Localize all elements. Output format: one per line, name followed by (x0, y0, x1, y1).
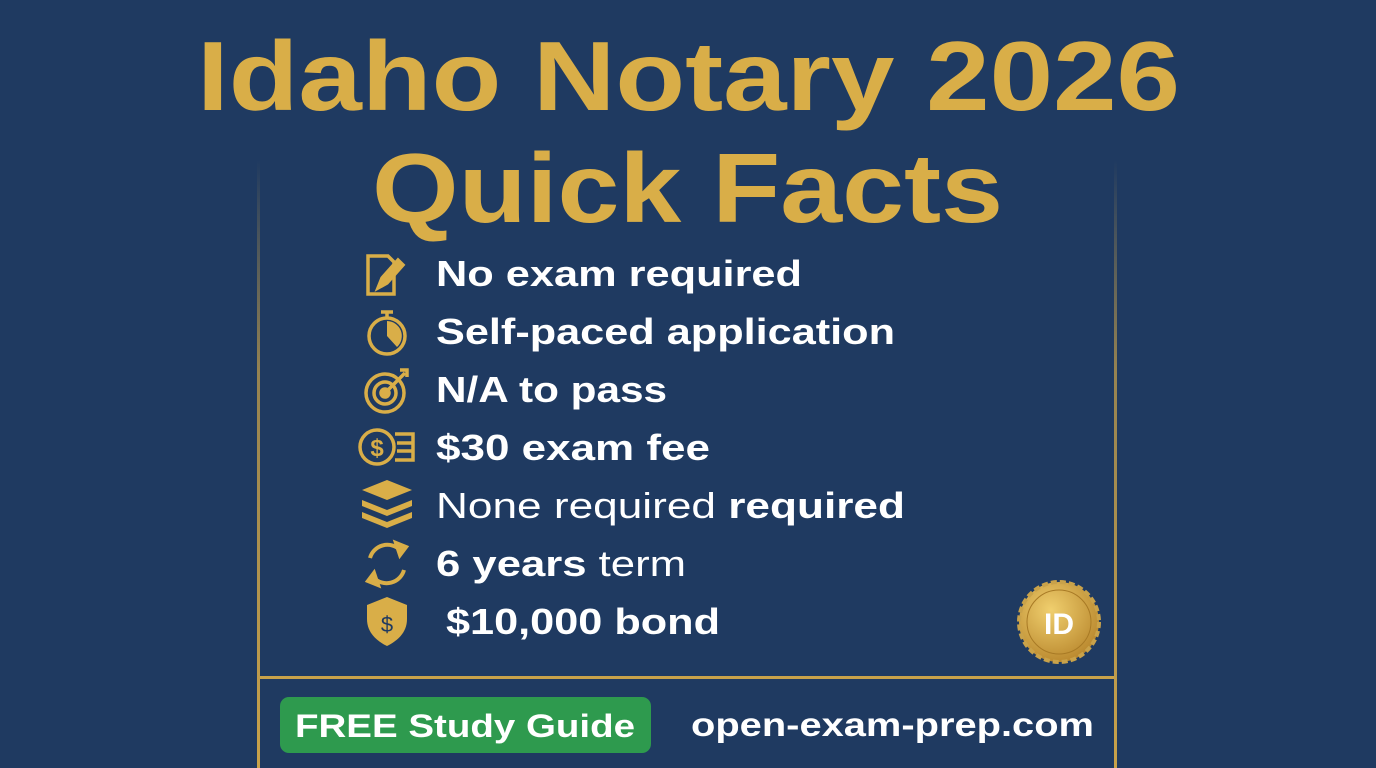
title: Quick Facts (372, 133, 1003, 243)
button: FREE Study Guide (280, 697, 651, 753)
fact: application: Self-paced application (436, 311, 895, 352)
fact: fee: $ (370, 435, 384, 462)
title (197, 21, 1180, 243)
fact: pass: N/A to pass (436, 369, 667, 410)
url: open-exam-prep.com (691, 706, 1094, 743)
fact: term: 6 years term (436, 543, 686, 584)
fact: application (369, 311, 895, 354)
fact: fee: $30 exam fee (436, 427, 710, 468)
fact: pass (366, 369, 667, 412)
seal: ID: ID (1044, 608, 1074, 641)
fact: fee (360, 427, 710, 468)
fact: education: None required required (436, 485, 905, 526)
panel frame (257, 160, 1117, 768)
button: FREE Study Guide: FREE Study Guide (295, 708, 635, 744)
fact: bond: $10,000 bond (446, 601, 720, 642)
facts list (360, 253, 905, 646)
fact: exam: No exam required (436, 253, 802, 294)
seal: ID (1019, 582, 1099, 662)
title: Idaho Notary 2026 (197, 21, 1180, 131)
fact: bond: $ (381, 612, 393, 637)
fact: bond (367, 597, 720, 646)
fact: education (362, 480, 905, 528)
